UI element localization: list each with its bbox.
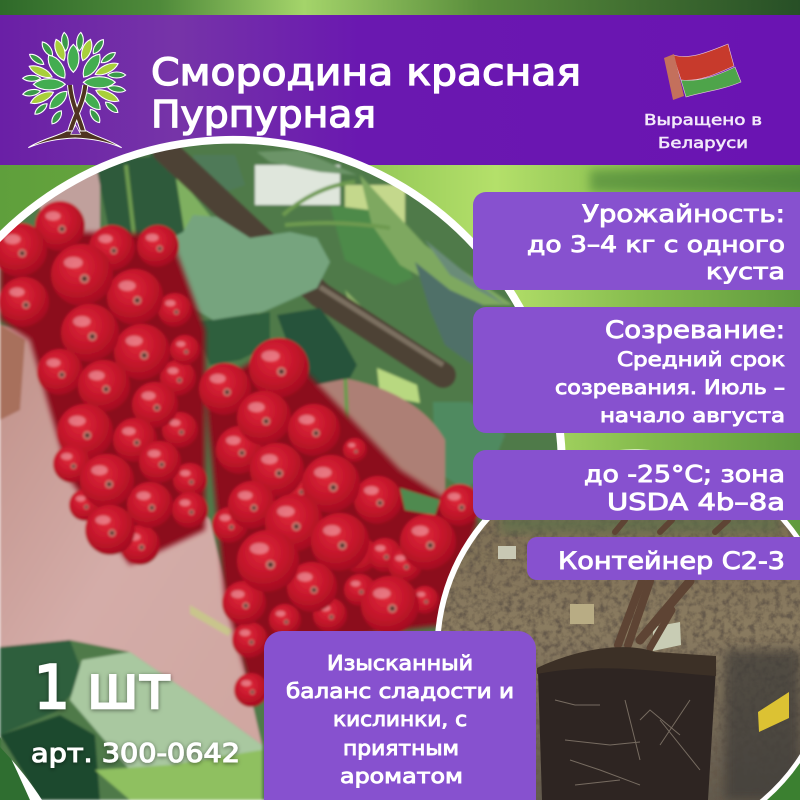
logo: tree — [22, 32, 126, 148]
panel: ripening — [473, 307, 800, 433]
plant labels — [498, 546, 789, 732]
title: Смородина красная — [151, 51, 581, 94]
quantity label: 1 шт — [34, 653, 171, 723]
panel: frost hardiness: USDA 4b–8a — [607, 490, 785, 516]
panel: taste description: кислинки, с — [333, 707, 467, 731]
panel: yield: Урожайность: — [582, 200, 785, 228]
grown in Belarus text: Выращено в — [644, 111, 762, 129]
photo background foliage — [0, 135, 560, 800]
panel: taste description: ароматом — [340, 764, 463, 788]
panel: ripening: созревания. Июль – — [555, 376, 785, 399]
panel: frost hardiness: до -25°С; зона — [584, 462, 785, 488]
tree leaves — [22, 32, 126, 126]
panel: frost hardiness — [473, 450, 800, 520]
photo: container plant in circle — [435, 449, 800, 800]
flag of Belarus — [664, 44, 741, 100]
title — [151, 51, 581, 136]
header band — [0, 15, 800, 165]
hand — [0, 325, 445, 745]
panel: yield: до 3–4 кг с одного — [527, 233, 785, 258]
tree trunk and roots — [28, 85, 122, 148]
panel: taste description: Изысканный — [327, 651, 473, 675]
berry stems — [126, 165, 390, 440]
article number: арт. 300-0642 — [31, 739, 240, 769]
grown in Belarus text: Беларуси — [658, 134, 748, 152]
panel: ripening: Средний срок — [617, 348, 785, 371]
panel: ripening: начало августа — [600, 404, 785, 427]
panel: yield — [473, 192, 800, 290]
panel: yield: куста — [706, 260, 785, 285]
panel: taste description: приятным — [343, 736, 459, 760]
grown in Belarus text — [644, 111, 762, 152]
garden background — [441, 520, 800, 800]
panel: taste description — [264, 631, 536, 800]
branch — [165, 150, 443, 375]
panel: container — [527, 537, 800, 580]
panel: container: Контейнер С2-3 — [558, 547, 785, 575]
title: Пурпурная — [151, 93, 376, 136]
stems — [615, 520, 728, 648]
root ball pot — [537, 647, 716, 800]
photo: red currant on hand — [0, 135, 566, 800]
berry clusters — [0, 201, 481, 707]
large currant leaf — [153, 215, 330, 320]
panel: ripening: Созревание: — [605, 316, 785, 344]
bottom-left leaves — [0, 640, 262, 800]
dark leaves under large leaf — [193, 308, 357, 386]
panel: taste description: баланс сладости и — [286, 679, 514, 703]
